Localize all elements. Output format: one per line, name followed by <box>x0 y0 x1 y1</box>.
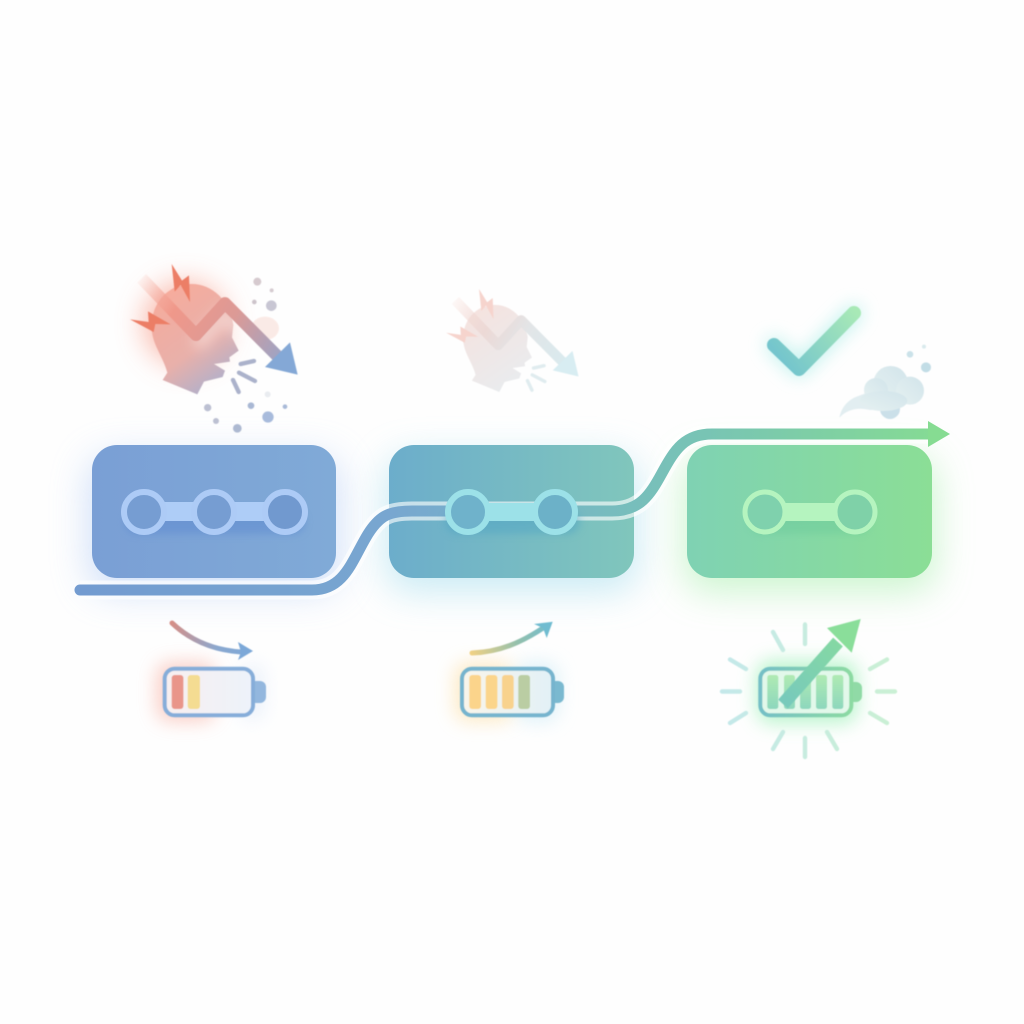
faded jagged arrow <box>455 300 579 376</box>
rising arrow <box>783 619 861 704</box>
icon: low battery <box>156 662 266 722</box>
panel glows <box>88 456 936 592</box>
jagged falling arrow <box>142 278 298 375</box>
lightning bolts <box>130 264 190 332</box>
stage two node chain <box>445 492 580 534</box>
arrow: rising energy trend <box>472 622 553 653</box>
panel: stage one <box>92 445 336 578</box>
panel: stage three <box>687 445 932 578</box>
particles <box>204 278 287 433</box>
rays <box>722 624 895 757</box>
stage one node chain <box>124 492 305 534</box>
faded head silhouette <box>463 305 532 392</box>
faded burst ticks <box>527 366 545 390</box>
head silhouette <box>152 284 239 394</box>
icon: medium battery <box>454 662 564 722</box>
burst ticks <box>233 361 255 392</box>
stage three node chain <box>745 492 875 534</box>
faded lightning bolts <box>446 289 493 343</box>
arrow: low energy trend <box>172 623 253 660</box>
icon: strong headache and falling arrow <box>130 264 298 433</box>
icon: check mark <box>774 313 854 369</box>
icon: faded headache and falling arrow <box>446 289 579 392</box>
icon: cloud puff <box>839 345 931 419</box>
panel: stage two <box>389 445 634 578</box>
icon: full battery with burst <box>722 619 895 757</box>
flow line with arrow <box>80 421 950 590</box>
